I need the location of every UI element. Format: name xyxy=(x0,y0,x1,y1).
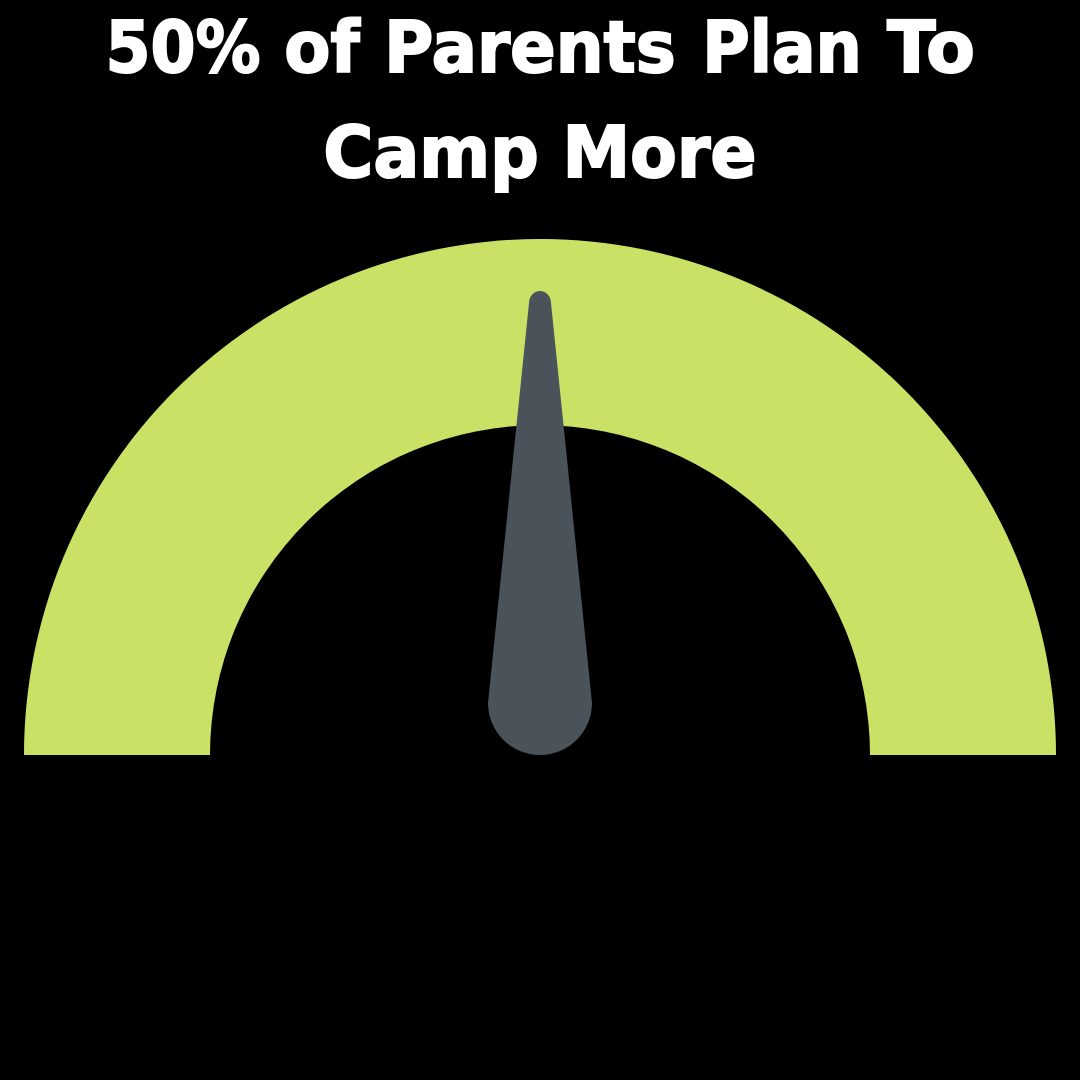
gauge arc xyxy=(24,239,1056,755)
gauge needle xyxy=(488,291,592,755)
title: of xyxy=(284,6,360,89)
title: 50% xyxy=(105,6,260,89)
title: Parents xyxy=(384,6,675,89)
title xyxy=(105,6,975,194)
title: Plan xyxy=(702,6,862,89)
title: To xyxy=(887,6,975,89)
title: Camp More xyxy=(323,110,757,194)
